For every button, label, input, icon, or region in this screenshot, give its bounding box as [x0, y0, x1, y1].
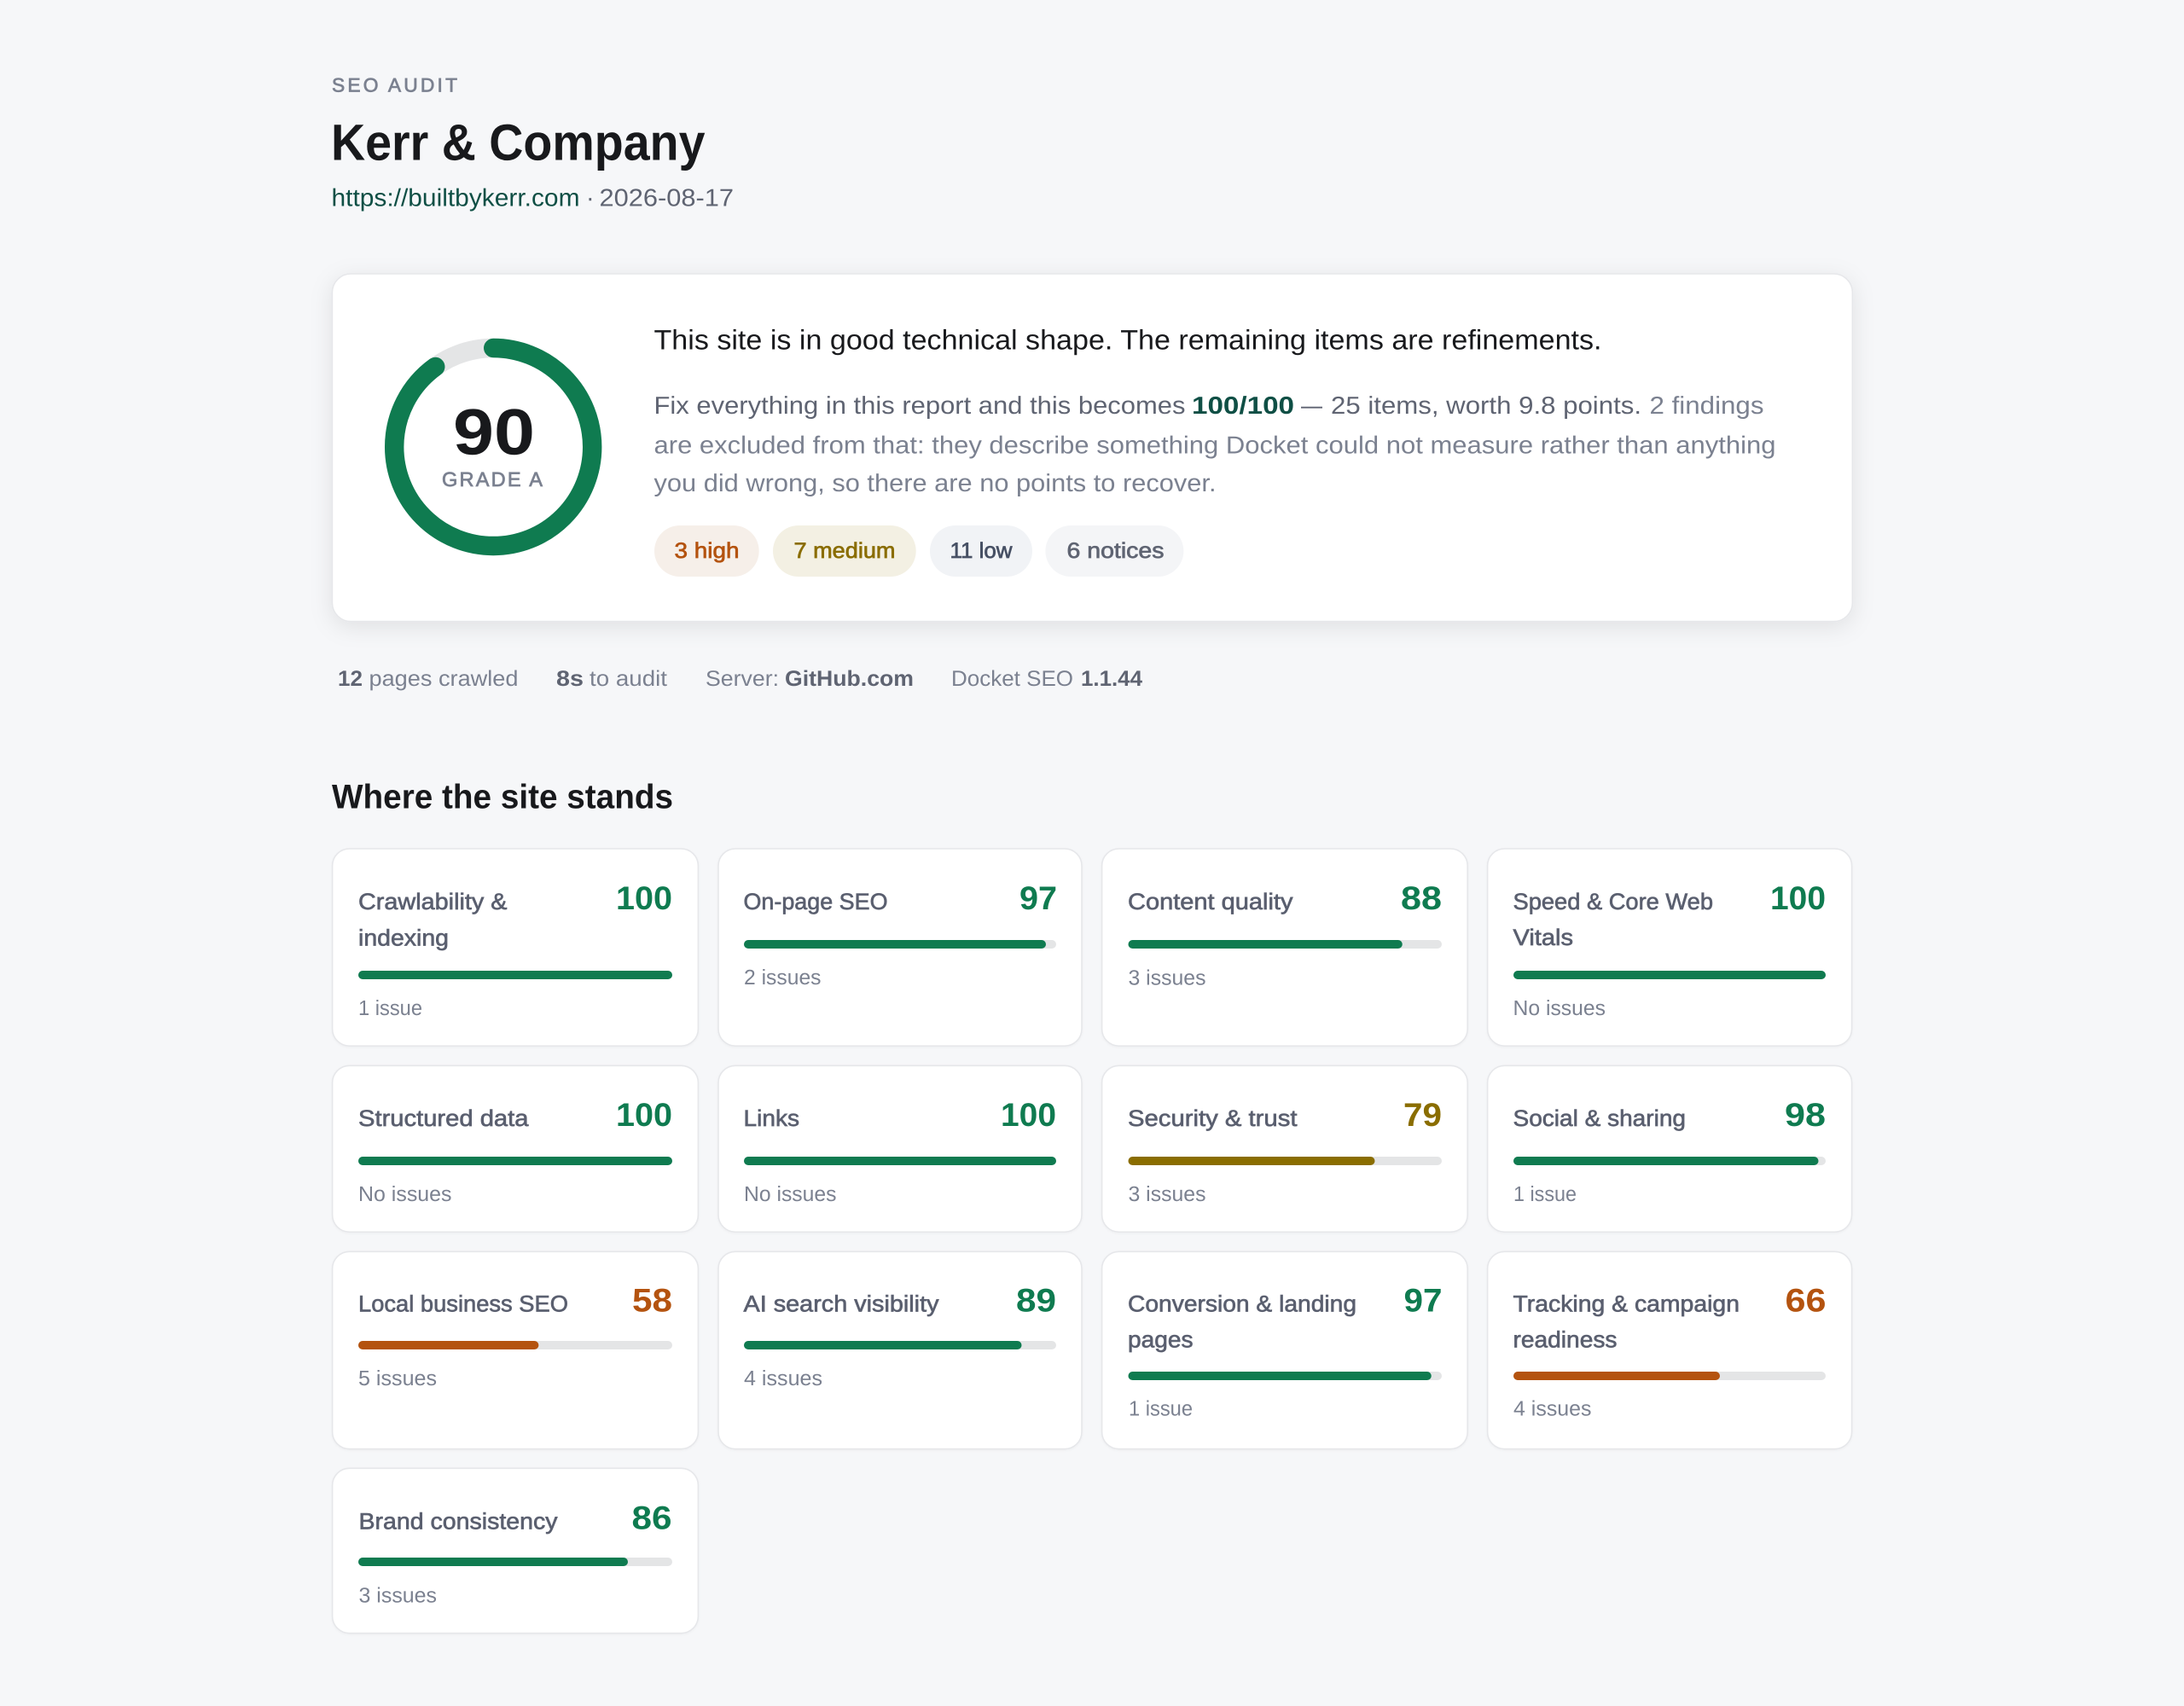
bar — [1128, 1372, 1442, 1380]
card: structured data — [333, 1065, 698, 1232]
score: 86 — [631, 1500, 672, 1536]
card: links — [718, 1065, 1082, 1232]
category scores grid — [333, 849, 1852, 1633]
crawl metadata row: 12 — [338, 667, 363, 691]
issues: 1 issue — [1129, 1397, 1193, 1420]
title: Kerr & Company — [331, 113, 706, 171]
crawl metadata row: GitHub.com — [785, 667, 914, 691]
crawl metadata row: Server: — [706, 667, 779, 691]
score ring — [394, 348, 592, 546]
issues: 4 issues — [744, 1367, 822, 1390]
score: 89 — [1016, 1283, 1056, 1320]
header — [331, 74, 734, 212]
issues: 1 issue — [358, 997, 422, 1020]
card: speed: Vitals — [1513, 925, 1573, 950]
card: on-page — [718, 849, 1082, 1046]
card: social — [1488, 1065, 1852, 1232]
label: Security & trust — [1128, 1105, 1298, 1131]
panel: score summary — [332, 274, 1852, 622]
issues: 4 issues — [1513, 1397, 1592, 1420]
label: Social & sharing — [1513, 1105, 1686, 1131]
crawl metadata row: to audit — [590, 667, 667, 691]
score: 66 — [1785, 1283, 1826, 1320]
score: 88 — [1401, 880, 1442, 917]
bar — [744, 940, 1056, 949]
label: Tracking & campaign — [1513, 1291, 1740, 1317]
label: Crawlability & — [358, 889, 508, 914]
score value: 90 — [453, 397, 535, 469]
badge: medium — [773, 525, 916, 577]
label: Local business SEO — [358, 1291, 568, 1317]
bar — [744, 1341, 1056, 1349]
summary paragraph: you did wrong, so there are no points to recover. — [653, 470, 1217, 497]
summary paragraph: are excluded from that: they describe something Docket could not measure rather than anything — [653, 432, 1776, 460]
score: 100 — [1001, 1097, 1056, 1134]
summary paragraph: 100/100 — [1192, 392, 1294, 420]
score: 97 — [1404, 1283, 1442, 1320]
badge: medium: 7 medium — [793, 539, 896, 563]
card: crawlability — [333, 849, 698, 1046]
site url: https://builtbykerr.com — [331, 185, 580, 212]
badge: low — [930, 525, 1032, 577]
label: AI search visibility — [744, 1291, 939, 1317]
bar — [358, 1558, 672, 1566]
bar — [1513, 971, 1826, 979]
score: 79 — [1403, 1097, 1442, 1134]
score: 100 — [616, 880, 672, 917]
issues: 5 issues — [358, 1367, 437, 1390]
issues: 3 issues — [358, 1584, 437, 1607]
card: security — [1102, 1065, 1467, 1232]
card: local business — [333, 1251, 698, 1449]
bar — [1513, 1372, 1826, 1380]
issues: 2 issues — [744, 966, 821, 989]
badge: notices: 6 notices — [1066, 539, 1164, 563]
bar — [358, 1157, 672, 1165]
card: ai search — [718, 1251, 1082, 1449]
summary paragraph: — — [1301, 392, 1322, 420]
badge: high — [654, 525, 759, 577]
audit date: 2026-08-17 — [599, 185, 734, 212]
summary paragraph: 25 items, worth 9.8 points. — [1331, 392, 1641, 420]
badge: notices — [1045, 525, 1183, 577]
label: Conversion & landing — [1128, 1291, 1356, 1317]
card: content quality — [1102, 849, 1467, 1046]
score: 58 — [632, 1283, 672, 1320]
crawl metadata row: 1.1.44 — [1081, 667, 1143, 691]
bar — [358, 971, 672, 979]
issues: No issues — [358, 1183, 452, 1206]
score: 100 — [1770, 880, 1826, 917]
badge: low: 11 low — [950, 539, 1013, 563]
score: 97 — [1019, 880, 1057, 917]
card: speed — [1488, 849, 1852, 1046]
summary paragraph: Fix everything in this report and this becomes — [653, 392, 1186, 420]
crawl metadata row — [338, 667, 1143, 691]
label: On-page SEO — [744, 889, 887, 914]
bar — [358, 1341, 672, 1349]
bar — [1513, 1157, 1826, 1165]
card: tracking — [1488, 1251, 1852, 1449]
issues: 3 issues — [1128, 966, 1206, 989]
crawl metadata row: pages crawled — [369, 667, 519, 691]
label: Speed & Core Web — [1513, 889, 1713, 914]
summary headline: This site is in good technical shape. The remaining items are refinements. — [653, 323, 1602, 355]
score: 98 — [1785, 1097, 1826, 1134]
bar — [1128, 940, 1442, 949]
crawl metadata row: Docket SEO — [951, 667, 1073, 691]
card: tracking: readiness — [1513, 1326, 1618, 1352]
bar — [744, 1157, 1056, 1165]
summary paragraph: 2 findings — [1650, 392, 1764, 420]
score: 100 — [616, 1097, 672, 1134]
label: Structured data — [358, 1105, 529, 1131]
issues: No issues — [744, 1183, 836, 1206]
issues: 1 issue — [1513, 1183, 1577, 1206]
card: crawlability: indexing — [358, 925, 449, 950]
section heading: Where the site stands — [332, 778, 673, 815]
label: Links — [744, 1105, 799, 1131]
eyebrow: SEO AUDIT — [332, 74, 457, 96]
grade label: GRADE A — [442, 469, 543, 491]
audit date: · — [586, 185, 595, 212]
badge: high: 3 high — [674, 539, 739, 563]
summary paragraph — [653, 392, 1776, 497]
crawl metadata row: 8s — [556, 667, 584, 691]
bar — [1128, 1157, 1442, 1165]
card: brand consistency — [333, 1468, 698, 1633]
issues: 3 issues — [1128, 1183, 1206, 1206]
label: Content quality — [1128, 889, 1293, 914]
card: conversion: pages — [1128, 1326, 1193, 1352]
label: Brand consistency — [358, 1508, 558, 1534]
issues: No issues — [1513, 997, 1606, 1020]
card: conversion — [1102, 1251, 1467, 1449]
